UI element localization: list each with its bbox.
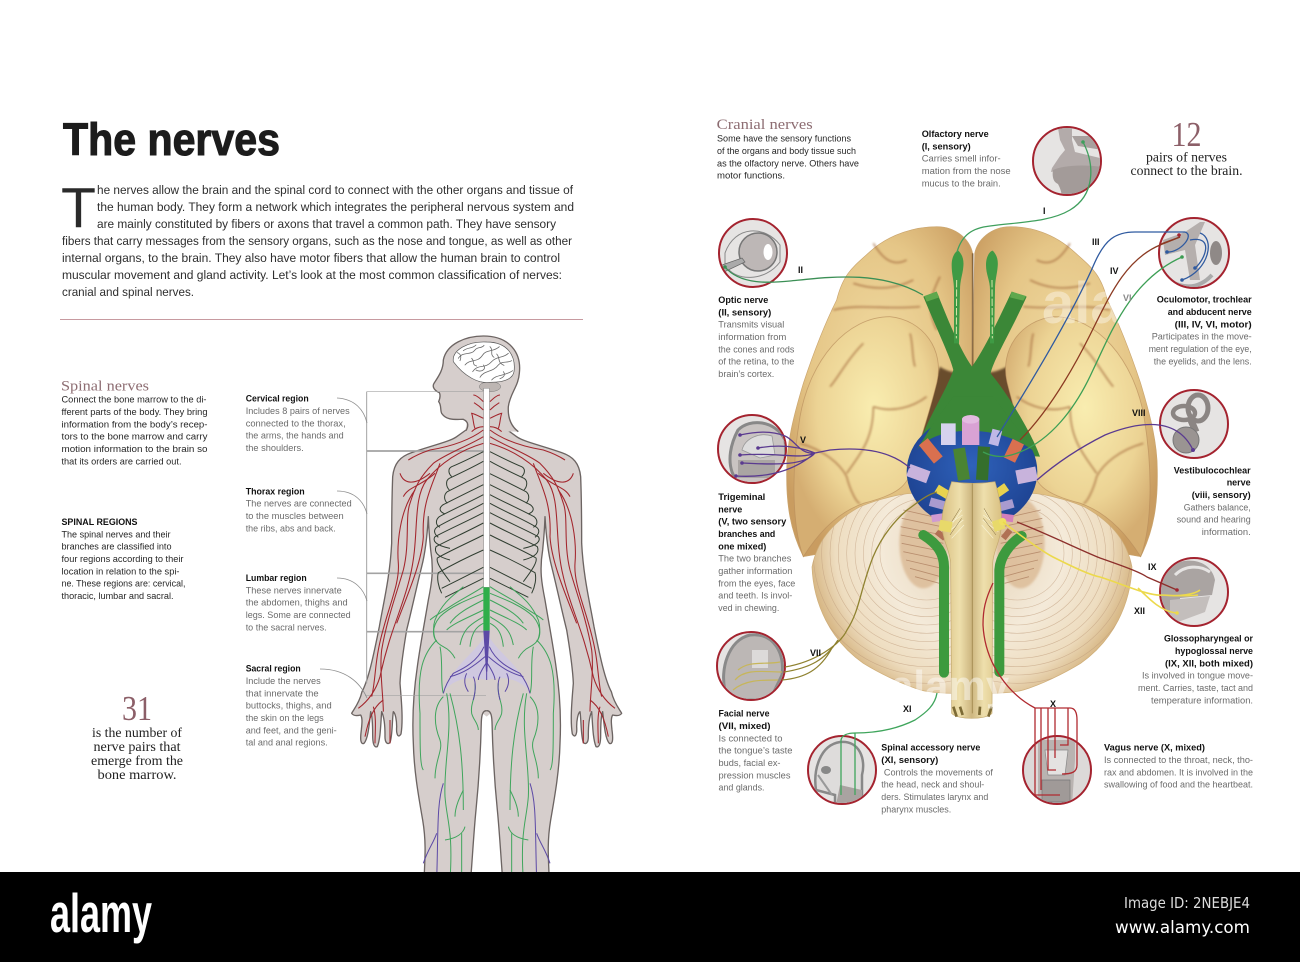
panel: spinal regions text <box>62 517 186 602</box>
inner lobules <box>899 498 1045 588</box>
text: vestibulocochlear nerve: Vestibulocochlear <box>1174 465 1251 476</box>
text: vagus nerve: rax and abdomen. It is involved in the <box>1104 767 1253 778</box>
cerebellum folia right <box>992 494 1130 684</box>
text: facial nerve: Is connected to <box>718 733 782 744</box>
intro paragraph: cranial and spinal nerves. <box>62 285 194 299</box>
watermark overlays: ala <box>1042 271 1123 336</box>
heading: cranial nerves: Some have the sensory functions <box>717 134 851 145</box>
text: facial nerve: (VII, mixed) <box>718 721 770 732</box>
callout: 12 pairs: connect to the brain. <box>1130 164 1242 179</box>
text: oculomotor nerve: the eyelids, and the lens. <box>1154 356 1252 367</box>
text: trigeminal nerve: The two branches <box>718 554 791 565</box>
panel: spinal nerves text: information from the body’s recep- <box>62 419 208 430</box>
text: optic nerve: information from <box>718 332 786 343</box>
nerve XI <box>841 693 937 795</box>
cranial nerve stubs <box>908 415 1037 538</box>
callout: 31 nerve pairs: nerve pairs that <box>94 740 181 755</box>
callout: 31 nerve pairs: is the number of <box>92 726 182 741</box>
cerebellum folia left <box>814 494 951 684</box>
text: vagus nerve: swallowing of food and the heartbeat. <box>1104 780 1253 791</box>
medulla and spinal stem <box>942 482 1002 718</box>
cortex sulci <box>800 243 1143 503</box>
roman numeral labels: IX <box>1148 562 1157 572</box>
text: facial nerve <box>718 709 792 794</box>
panel: spinal regions text: location in relation to the spi- <box>62 566 180 577</box>
text: spinal accessory nerve: ders. Stimulates larynx and <box>881 792 988 803</box>
callout: 31 nerve pairs: 31 <box>122 689 152 728</box>
panel: spinal nerves text: that its orders are carried out. <box>62 456 182 467</box>
watermark overlays: alamy <box>890 662 1010 709</box>
text: spinal accessory nerve <box>881 743 993 815</box>
roman numeral labels <box>798 206 1157 714</box>
panel: spinal nerves text <box>61 378 208 467</box>
text: vestibulocochlear nerve: Gathers balance, <box>1184 502 1251 513</box>
panel: spinal regions text: four regions according to their <box>62 554 184 565</box>
text: trigeminal nerve: one mixed) <box>718 541 766 552</box>
text: glossopharyngeal nerve <box>1138 634 1253 706</box>
text: optic nerve: Optic nerve <box>718 295 768 306</box>
panel: spinal nerves text: motion information to the brain so <box>62 444 208 455</box>
nerve VII <box>782 492 937 680</box>
heading: cranial nerves: of the organs and body tissue such <box>717 146 856 157</box>
text block: lumbar region <box>246 573 351 633</box>
region guide lines <box>365 392 488 696</box>
text: glossopharyngeal nerve: temperature information. <box>1151 695 1253 706</box>
roman numeral labels: VI <box>1123 293 1132 303</box>
panel: spinal nerves text: fferent parts of the body. They bring <box>62 407 208 418</box>
text: trigeminal nerve: and teeth. Is invol- <box>718 591 792 602</box>
panel: spinal regions text: branches are classified into <box>62 542 172 553</box>
text: spinal accessory nerve: the head, neck and shoul- <box>881 780 984 791</box>
cerebellum <box>812 493 1132 694</box>
nerve IX <box>1017 522 1177 590</box>
cerebrum temporal lobes <box>794 317 1150 557</box>
panel: spinal nerves text: Connect the bone marrow to the di- <box>62 395 206 406</box>
panel: spinal nerves text: tors to the bone marrow and carry <box>62 432 208 443</box>
text: vestibulocochlear nerve: nerve <box>1227 478 1251 489</box>
nerve V <box>736 432 910 476</box>
intro paragraph: the human body. They form a network which integrates the peripheral nervous system and <box>97 200 574 214</box>
text: facial nerve: and glands. <box>718 783 764 794</box>
nerves: mirrored side <box>487 395 615 880</box>
cerebrum frontal lobes <box>787 227 1157 557</box>
lateral green spinal roots <box>923 535 1022 673</box>
brain illustration <box>787 227 1157 718</box>
text: glossopharyngeal nerve: hypoglossal nerve <box>1175 646 1253 657</box>
intro paragraph: muscular movement and gland activity. Let’s look at the most common classification of nerves: <box>62 268 562 282</box>
nerve X <box>983 583 1077 795</box>
intro paragraph: internal organs, to the brain. They also have motor fibers that allow the human brain to control <box>62 251 560 265</box>
text block: sacral region: that innervate the <box>246 688 319 699</box>
roman numeral labels: VII <box>810 648 821 658</box>
circle: eye <box>719 219 787 287</box>
roman numeral labels: II <box>798 265 803 275</box>
text: vestibulocochlear nerve: (viii, sensory) <box>1192 490 1251 501</box>
footer url: www.alamy.com <box>1115 918 1250 938</box>
right half of body <box>487 430 622 880</box>
red cervical nerves <box>358 395 483 743</box>
midline fissure <box>970 253 975 370</box>
text block: thorax region: to the muscles between <box>246 511 344 522</box>
text: olfactory nerve: Carries smell infor- <box>922 154 1001 165</box>
green over pons top <box>917 397 1040 457</box>
text: olfactory nerve: mucus to the brain. <box>922 178 1001 189</box>
roman numeral labels: V <box>800 435 806 445</box>
text: spinal accessory nerve: Controls the movements of <box>884 767 993 778</box>
text: vagus nerve: Is connected to the throat, neck, tho- <box>1104 755 1253 766</box>
text: optic nerve: of the retina, to the <box>718 357 794 368</box>
roman numeral labels: XI <box>903 704 912 714</box>
text: vagus nerve: Vagus nerve (X, mixed) <box>1104 743 1205 754</box>
dark shadow around chiasm <box>913 367 1043 477</box>
text block: sacral region: and feet, and the geni- <box>246 725 337 736</box>
text: facial nerve: pression muscles <box>718 770 791 781</box>
circle: vestibulocochlear <box>1160 390 1228 458</box>
circle: olfactory <box>1033 127 1102 200</box>
text: trigeminal nerve: ved in chewing. <box>718 603 779 614</box>
text: vestibulocochlear nerve <box>1174 465 1251 538</box>
roman numeral labels: I <box>1043 206 1046 216</box>
roman numeral labels: IV <box>1110 266 1119 276</box>
drop cap: T <box>61 176 96 240</box>
text: glossopharyngeal nerve: Is involved in tongue move- <box>1142 671 1253 682</box>
text block: cervical region: Includes 8 pairs of nerves <box>246 406 350 417</box>
optic chiasm and tracts <box>917 292 1040 457</box>
text block: cervical region <box>246 394 350 454</box>
text block: lumbar region: legs. Some are connected <box>246 610 351 621</box>
heading: cranial nerves: as the olfactory nerve. Others have <box>717 158 859 169</box>
text: optic nerve: (II, sensory) <box>718 307 771 318</box>
nerve VIII <box>1037 424 1193 480</box>
text: optic nerve <box>718 295 794 380</box>
text: facial nerve: the tongue’s taste <box>718 746 792 757</box>
body outline <box>352 430 487 880</box>
callout: 12 pairs: 12 <box>1172 115 1202 154</box>
text: trigeminal nerve: branches and <box>718 529 775 540</box>
text block: lumbar region: to the sacral nerves. <box>246 622 327 633</box>
callout: 31 nerve pairs: bone marrow. <box>98 768 176 783</box>
text block: thorax region <box>246 486 352 534</box>
rib nerves <box>434 452 483 597</box>
callout: 12 pairs: pairs of nerves <box>1146 151 1227 166</box>
text: optic nerve: brain’s cortex. <box>718 369 774 380</box>
text: spinal accessory nerve: pharynx muscles. <box>881 804 951 815</box>
spinal cord <box>483 388 490 680</box>
circle: trigeminal <box>718 415 786 490</box>
text: oculomotor nerve: (III, IV, VI, motor) <box>1175 319 1252 330</box>
footer image id: Image ID: 2NEBJE4 <box>1124 894 1250 912</box>
callout: 31 nerve pairs: emerge from the <box>91 754 183 769</box>
footer bar <box>0 872 1300 962</box>
panel: spinal regions text: thoracic, lumbar and sacral. <box>62 591 174 602</box>
text block: cervical region: the arms, the hands and <box>246 431 344 442</box>
brain in head <box>453 342 514 392</box>
olfactory tracts <box>952 251 998 343</box>
text: vestibulocochlear nerve: sound and hearing <box>1177 515 1251 526</box>
text block: sacral region: Sacral region <box>246 664 301 675</box>
text: facial nerve: buds, facial ex- <box>718 758 780 769</box>
nerve XII <box>1003 522 1200 613</box>
text: olfactory nerve: (I, sensory) <box>922 141 971 152</box>
text block: sacral region <box>246 664 337 749</box>
text: glossopharyngeal nerve: Glossopharyngeal or <box>1164 634 1253 645</box>
text: glossopharyngeal nerve: ment. Carries, taste, tact and <box>1138 683 1253 694</box>
text: optic nerve: the cones and rods <box>718 344 794 355</box>
nerve IV <box>1020 237 1180 440</box>
text: trigeminal nerve: nerve <box>718 504 742 515</box>
text: oculomotor nerve <box>1149 295 1252 367</box>
text: spinal accessory nerve: (XI, sensory) <box>881 755 938 766</box>
panel: spinal regions text: SPINAL REGIONS <box>62 517 138 528</box>
heading: cranial nerves <box>717 117 859 182</box>
text block: sacral region: buttocks, thighs, and <box>246 701 332 712</box>
nerve VI <box>983 257 1182 456</box>
text block: lumbar region: Lumbar region <box>246 573 307 584</box>
heading: cranial nerves: motor functions. <box>717 171 785 182</box>
circle: glossopharyngeal <box>1160 558 1228 626</box>
text: olfactory nerve: Olfactory nerve <box>922 129 989 140</box>
footer logo: alamy <box>50 882 152 944</box>
body diagram with nerves <box>352 336 622 880</box>
text block: sacral region: Include the nerves <box>246 676 321 687</box>
nerve I <box>957 142 1091 252</box>
green lumbar and leg nerves <box>419 587 483 880</box>
nerve end dots <box>723 140 1195 615</box>
text: vagus nerve <box>1104 743 1253 791</box>
text block: sacral region: tal and anal regions. <box>246 738 328 749</box>
panel: spinal regions text: ne. These regions are: cervical, <box>62 579 186 590</box>
text block: cervical region: Cervical region <box>246 394 309 405</box>
callout curves: region labels <box>320 398 367 698</box>
text block: thorax region: Thorax region <box>246 486 305 497</box>
callout: 12 pairs <box>1130 115 1242 179</box>
heading: spinal nerves: Spinal nerves <box>61 378 149 394</box>
circle: facial <box>717 632 785 700</box>
text block: cervical region: the shoulders. <box>246 443 304 454</box>
text block: thorax region: the ribs, abs and back. <box>246 524 336 534</box>
text: trigeminal nerve: (V, two sensory <box>718 517 787 528</box>
text: spinal accessory nerve: Spinal accessory nerve <box>881 743 980 754</box>
text: olfactory nerve <box>922 129 1011 189</box>
intro paragraph: fibers that carry messages from the sensory organs, such as the nose and tongue, as well as other <box>62 234 572 248</box>
text block: lumbar region: These nerves innervate <box>246 585 342 596</box>
text: oculomotor nerve: Oculomotor, trochlear <box>1157 295 1252 306</box>
text: glossopharyngeal nerve: (IX, XII, both mixed) <box>1165 658 1253 669</box>
heading: cranial nerves: Cranial nerves <box>717 117 813 133</box>
nerve II <box>725 267 923 295</box>
text block: cervical region: connected to the thorax, <box>246 418 346 429</box>
roman numeral labels: X <box>1050 699 1056 709</box>
text: trigeminal nerve: Trigeminal <box>718 492 765 503</box>
text: oculomotor nerve: ment regulation of the eye, <box>1149 344 1252 355</box>
intro paragraph <box>61 176 574 299</box>
text block: lumbar region: the abdomen, thighs and <box>246 598 348 609</box>
watermark overlays <box>890 271 1123 709</box>
text: optic nerve: Transmits visual <box>718 320 784 331</box>
title: The nerves <box>63 114 280 165</box>
circle: oculomotor <box>1158 218 1229 288</box>
text: oculomotor nerve: and abducent nerve <box>1168 307 1252 318</box>
circle: vagus <box>1023 736 1091 806</box>
text: olfactory nerve: mation from the nose <box>922 166 1011 177</box>
nerve III <box>997 232 1185 437</box>
intro paragraph: are mainly constituted by fibers or axons that travel a common path. They have sensory <box>97 217 557 231</box>
roman numeral labels: XII <box>1134 606 1145 616</box>
text: trigeminal nerve: from the eyes, face <box>718 578 795 589</box>
head silhouette <box>433 336 520 432</box>
text: trigeminal nerve <box>718 492 795 614</box>
lavender sacral area <box>445 632 528 690</box>
nerves: one side <box>358 395 486 880</box>
text block: thorax region: The nerves are connected <box>246 499 352 510</box>
text: facial nerve: Facial nerve <box>718 709 770 720</box>
panel: spinal regions text: The spinal nerves and their <box>62 529 171 540</box>
text: vestibulocochlear nerve: information. <box>1202 527 1251 538</box>
roman numeral labels: III <box>1092 237 1100 247</box>
yellow fan stubs <box>939 523 1004 527</box>
purple sacral nerves <box>423 647 486 880</box>
nerve leader lines <box>725 142 1200 795</box>
text block: sacral region: the skin on the legs <box>246 713 324 724</box>
pons <box>907 415 1037 528</box>
circle: spinal accessory <box>808 736 876 810</box>
roman numeral labels: VIII <box>1132 408 1146 418</box>
text: oculomotor nerve: Participates in the move- <box>1152 332 1252 343</box>
intro paragraph: he nerves allow the brain and the spinal cord to connect with the other organs and tissue of <box>97 183 574 197</box>
text: trigeminal nerve: gather information <box>718 566 792 577</box>
callout: 31 nerve pairs <box>91 689 183 783</box>
